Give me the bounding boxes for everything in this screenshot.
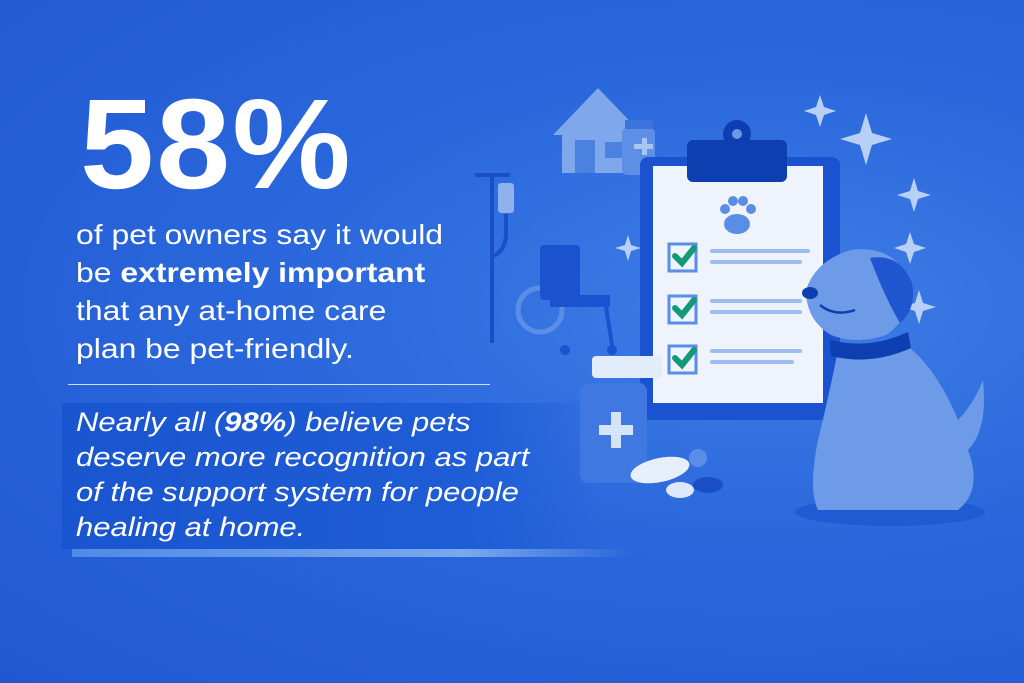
icon: pills <box>628 449 723 498</box>
callout: 98% <box>62 403 602 549</box>
stat description <box>76 219 443 364</box>
callout: 98%: healing at home. <box>76 512 305 542</box>
checklist <box>669 244 808 373</box>
callout: 98%: deserve more recognition as part <box>76 442 529 472</box>
clipboard <box>640 120 840 420</box>
callout: 98%: Nearly all (98%) believe pets <box>76 407 471 437</box>
icon: house <box>553 88 643 173</box>
icon: wheelchair <box>518 245 617 355</box>
big stat: 58% <box>80 73 353 216</box>
icon: medicine bottle <box>580 356 662 483</box>
icon: jar <box>622 120 655 175</box>
callout: 98%: of the support system for people <box>76 477 519 507</box>
icon: paw <box>720 196 756 234</box>
icon: sparkles <box>615 95 936 324</box>
stat description: that any at-home care <box>76 295 386 326</box>
stat description: plan be pet-friendly. <box>76 333 354 364</box>
icon: IV pole <box>475 175 514 343</box>
icon: dog <box>795 249 985 526</box>
stat description: of pet owners say it would <box>76 219 443 250</box>
stat description: be extremely important <box>76 257 425 288</box>
